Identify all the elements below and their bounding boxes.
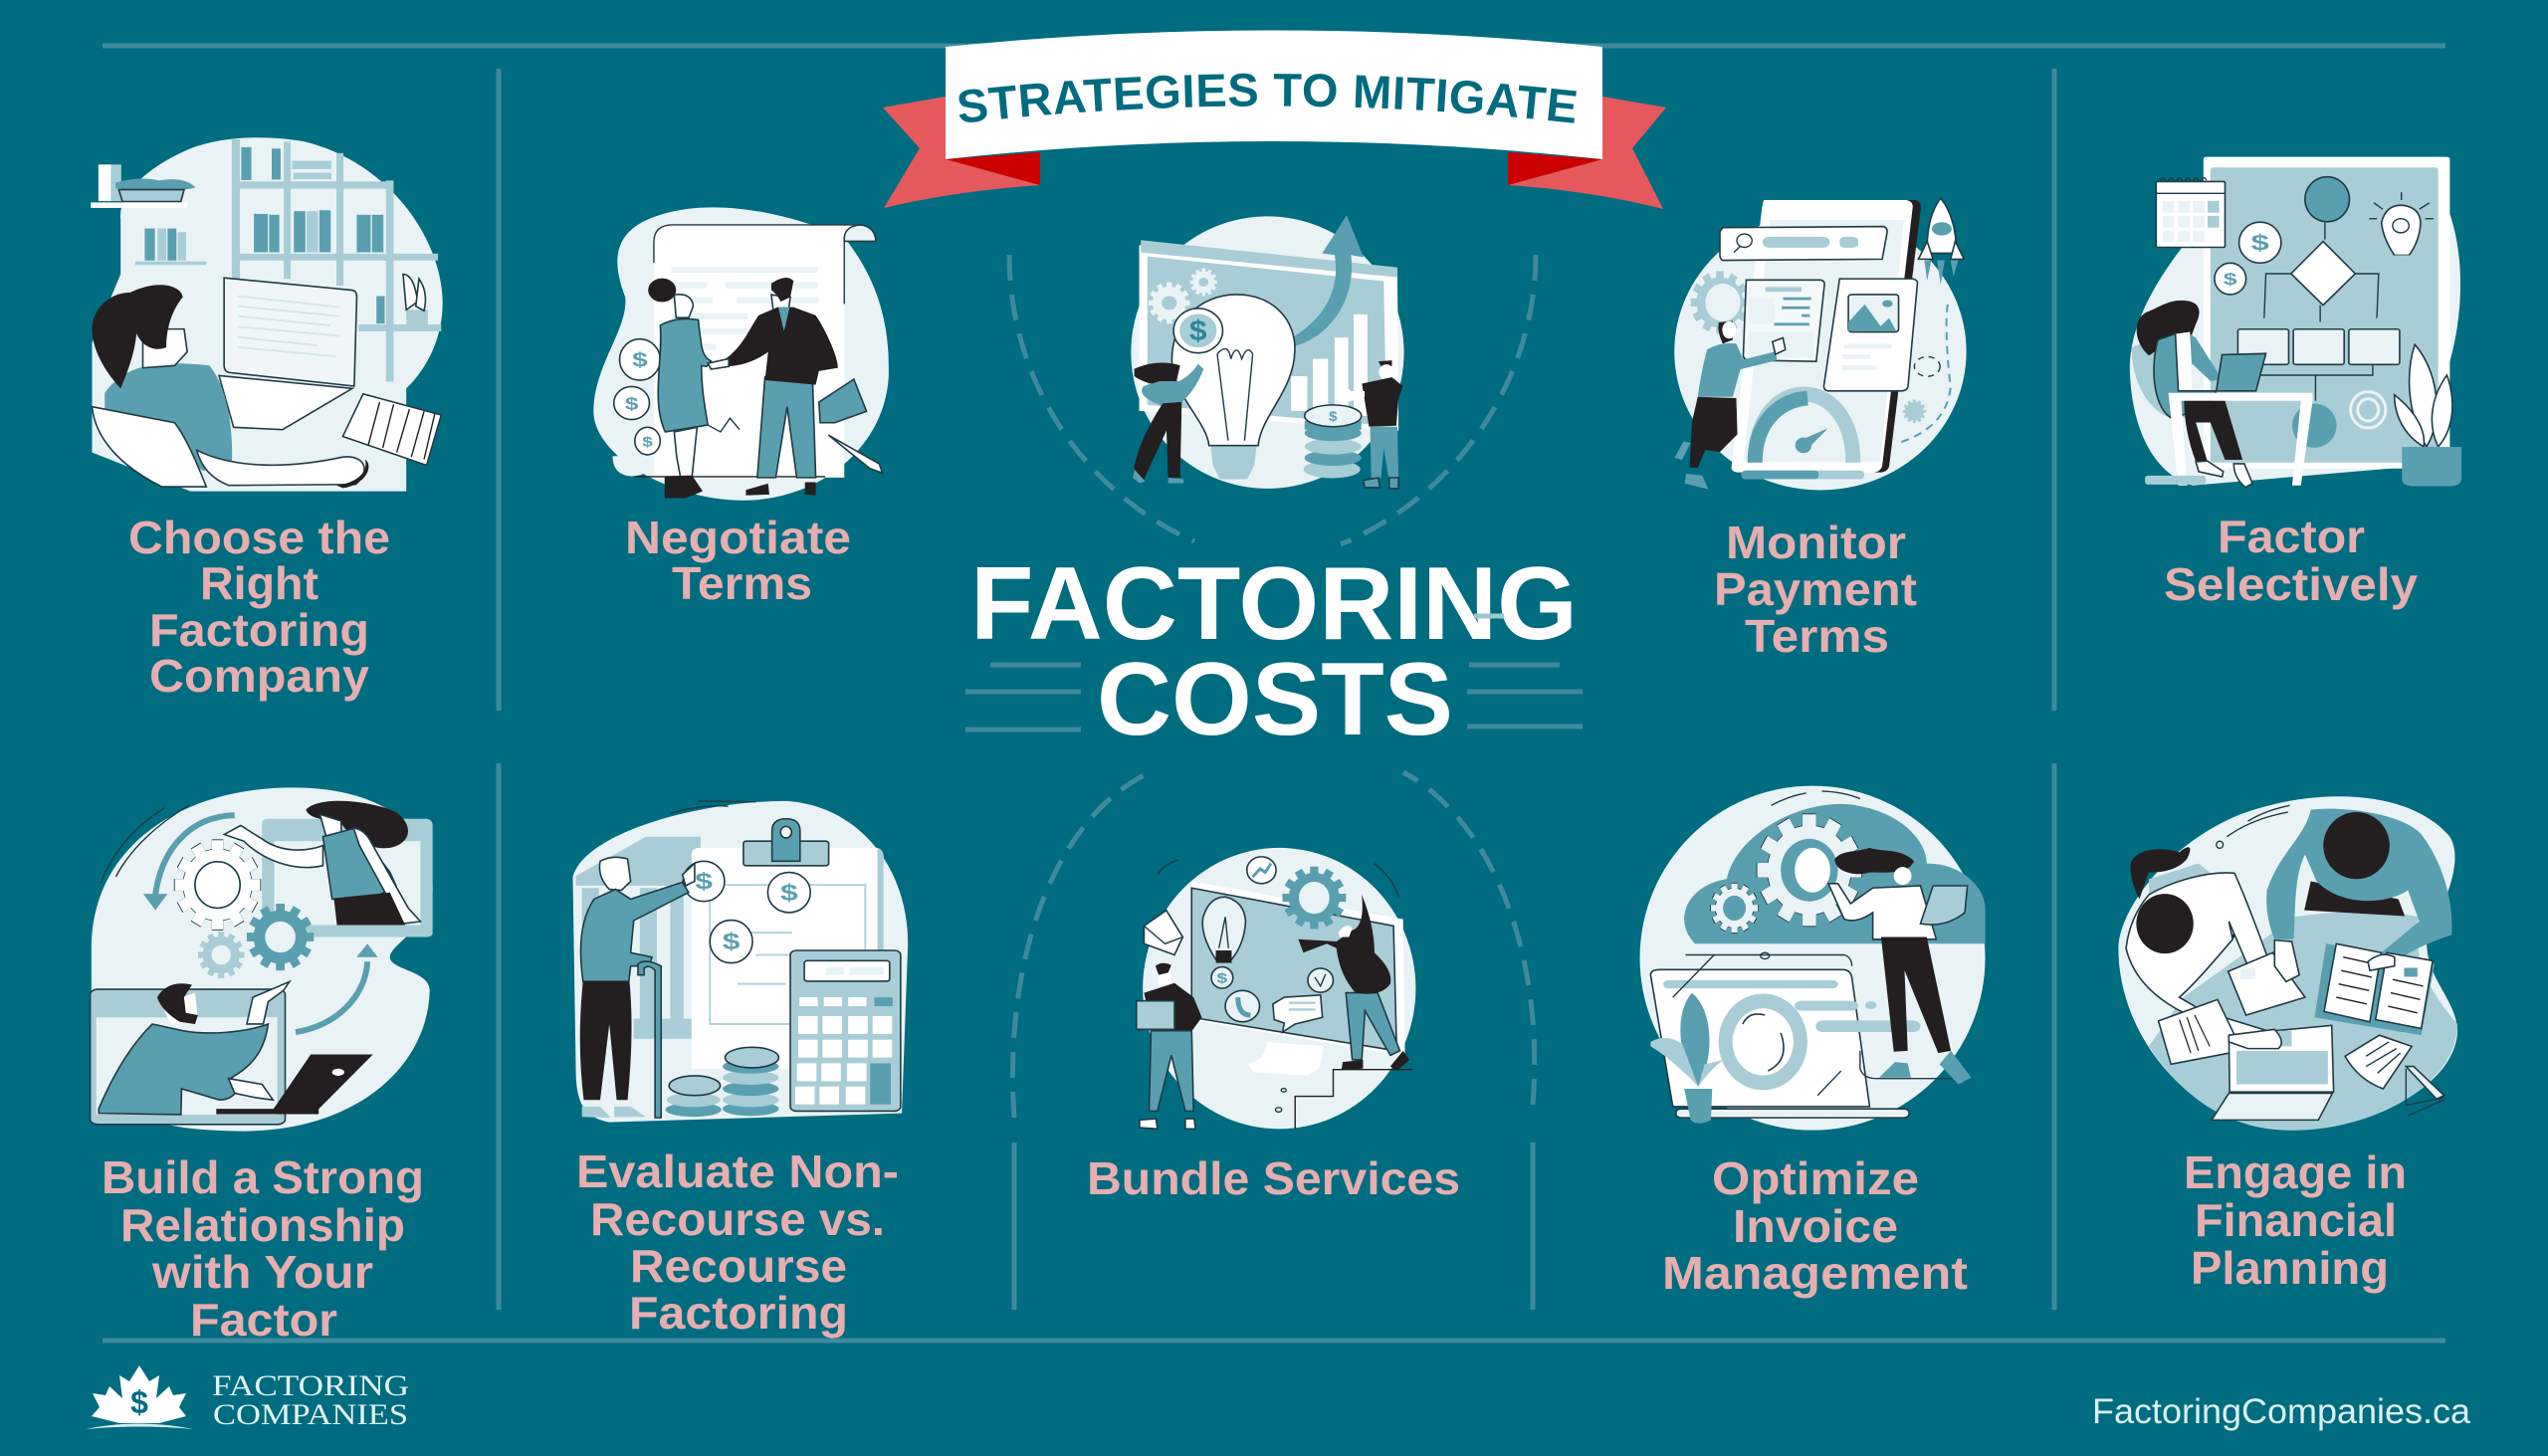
panel: monitor payment terms: [1674, 198, 1967, 662]
illustration: two people turning gears: [91, 787, 433, 1132]
illustration: handshake in front of contract: [593, 207, 889, 501]
man pointing: [1674, 320, 1786, 490]
logo: factoring companies: [86, 1365, 409, 1431]
label: Monitor: [1726, 517, 1906, 568]
coins: [2215, 222, 2281, 295]
logo text: [212, 1369, 409, 1431]
bulb: [2369, 192, 2434, 266]
man: [708, 278, 883, 496]
cloud: [1684, 804, 1986, 943]
icons on screen: [1202, 867, 1346, 1032]
label: [576, 1145, 899, 1339]
calendar: [2156, 178, 2226, 248]
coin stack: $: [1329, 409, 1338, 425]
panel: factor selectively: [2130, 157, 2461, 610]
standing man: [1137, 963, 1201, 1129]
label: Recourse: [630, 1240, 847, 1292]
coin stacks: [666, 1047, 778, 1117]
bank building: [576, 837, 701, 1039]
rocket: [1918, 198, 1964, 285]
logo text: COMPANIES: [213, 1398, 408, 1431]
envelope: [1144, 911, 1182, 954]
calculator: [790, 950, 901, 1111]
panel: bundle services: [1087, 848, 1460, 1204]
label: [625, 512, 851, 609]
coin held: [1173, 309, 1222, 353]
loose page and glasses: [2345, 1035, 2444, 1116]
label: [2164, 511, 2418, 610]
top man: [2266, 809, 2452, 966]
main title: factoring costs: COSTS: [1097, 642, 1453, 757]
label: Recourse vs.: [590, 1193, 885, 1245]
image card: [1823, 279, 1918, 391]
coins: $: [780, 880, 798, 906]
illustration: overhead view of people at table: [2118, 796, 2457, 1131]
coins: $: [642, 434, 654, 450]
woman at laptop: [2132, 301, 2313, 488]
label: Bundle Services: [1087, 1152, 1460, 1204]
label: Payment: [1714, 563, 1917, 615]
main title: factoring costs: [965, 546, 1583, 757]
coins: $: [625, 395, 639, 414]
ribbon tail: right: [1508, 97, 1666, 209]
top window: [262, 819, 433, 937]
label: [1662, 1152, 1968, 1299]
banner: strategies to mitigate: [883, 30, 1666, 209]
label: Management: [1662, 1247, 1968, 1299]
website url: FactoringCompanies.ca: [2092, 1392, 2471, 1431]
ribbon body: [946, 30, 1602, 159]
banner text: STRATEGIES TO MITIGATE: [959, 74, 1577, 123]
label: Negotiate: [625, 512, 851, 563]
climbing person: [1298, 895, 1409, 1071]
icons on screen: $: [1217, 970, 1227, 986]
label: Invoice: [1733, 1200, 1898, 1252]
laptop: [2212, 1025, 2334, 1120]
coins: [612, 339, 660, 476]
gauge: [1742, 394, 1864, 479]
label: [102, 1151, 424, 1346]
illustration: central growth idea with bulb, chart and coins: [1131, 215, 1404, 489]
icon: maple leaf with dollar sign: $: [130, 1384, 148, 1420]
arc arrows: [155, 815, 235, 895]
label: Engage in: [2184, 1146, 2407, 1198]
panel: build a strong relationship: [91, 787, 433, 1346]
man with tablet: [1340, 360, 1402, 489]
woman from above: [2126, 847, 2281, 1050]
coin stack: [1304, 405, 1362, 478]
panel: evaluate non-recourse vs recourse factoring: [572, 801, 908, 1339]
coins: $: [632, 349, 648, 372]
label: Terms: [1745, 610, 1889, 662]
woman with tablet: [1828, 848, 1971, 1085]
coin held: $: [1189, 316, 1207, 347]
content card: [1743, 280, 1824, 361]
label: with Your: [151, 1246, 373, 1298]
elderly man: [580, 857, 695, 1118]
label: Selectively: [2164, 558, 2418, 610]
icon: maple leaf with dollar sign: [86, 1365, 193, 1429]
logo text: FACTORING: [212, 1369, 409, 1402]
illustration: dashboards and gauge: [1674, 198, 1967, 490]
label: Planning: [2191, 1242, 2389, 1294]
illustration: woman with flow chart: [2130, 157, 2461, 488]
coins: $: [723, 929, 741, 954]
coins: $: [2224, 271, 2237, 289]
illustration: people with monitor of services: [1137, 848, 1415, 1129]
label: Right: [200, 557, 318, 609]
light bulb: [1171, 295, 1295, 479]
label: Financial: [2195, 1194, 2397, 1246]
label: Optimize: [1712, 1152, 1919, 1204]
label: Factoring: [149, 604, 369, 656]
monitor: [1191, 882, 1405, 1076]
panel: choose the right factoring company: [91, 137, 443, 702]
illustration: cloud gears and laptop: [1640, 786, 1986, 1131]
laptop: [216, 1054, 373, 1115]
search bar: [1720, 227, 1887, 261]
label: Relationship: [120, 1199, 405, 1251]
flow chart: [2237, 177, 2400, 401]
ribbon tail: left: [883, 97, 1040, 208]
plant: [2395, 344, 2461, 487]
papers: [2159, 940, 2305, 1064]
woman: [224, 801, 420, 925]
growth arrow: [1294, 215, 1364, 346]
woman: [648, 279, 711, 499]
label: Company: [149, 650, 369, 702]
illustration: man with clipboard and calculator: [572, 801, 908, 1123]
coins: $: [2251, 231, 2269, 255]
label: Evaluate Non-: [576, 1145, 899, 1197]
panel: negotiate terms: [593, 207, 889, 609]
plant: [1650, 993, 1724, 1124]
label: Terms: [672, 557, 812, 609]
wall shelf with plant and books: [91, 164, 195, 208]
illustration: woman at laptop in front of bookshelf: [91, 137, 443, 492]
woman with coin: [1133, 363, 1203, 483]
label: [1714, 517, 1917, 662]
clipboard: [692, 819, 884, 1069]
coins: $: [695, 869, 713, 895]
panel: engage in financial planning: [2118, 796, 2457, 1294]
coins: [683, 861, 810, 963]
open book: [2314, 943, 2435, 1035]
main title: factoring costs: FACTORING: [970, 546, 1578, 662]
label: Build a Strong: [102, 1151, 424, 1203]
panel: optimize invoice management: [1640, 786, 1986, 1299]
label: [2184, 1146, 2407, 1294]
label: Factor: [2218, 511, 2365, 562]
label: Factoring: [629, 1287, 848, 1339]
label: [128, 512, 390, 702]
woman at desk: [92, 285, 368, 488]
label: Factor: [190, 1294, 337, 1346]
bottom window with man: [91, 981, 290, 1125]
laptop: [1650, 954, 1952, 1118]
label: Choose the: [128, 512, 390, 563]
gears: [174, 839, 314, 978]
